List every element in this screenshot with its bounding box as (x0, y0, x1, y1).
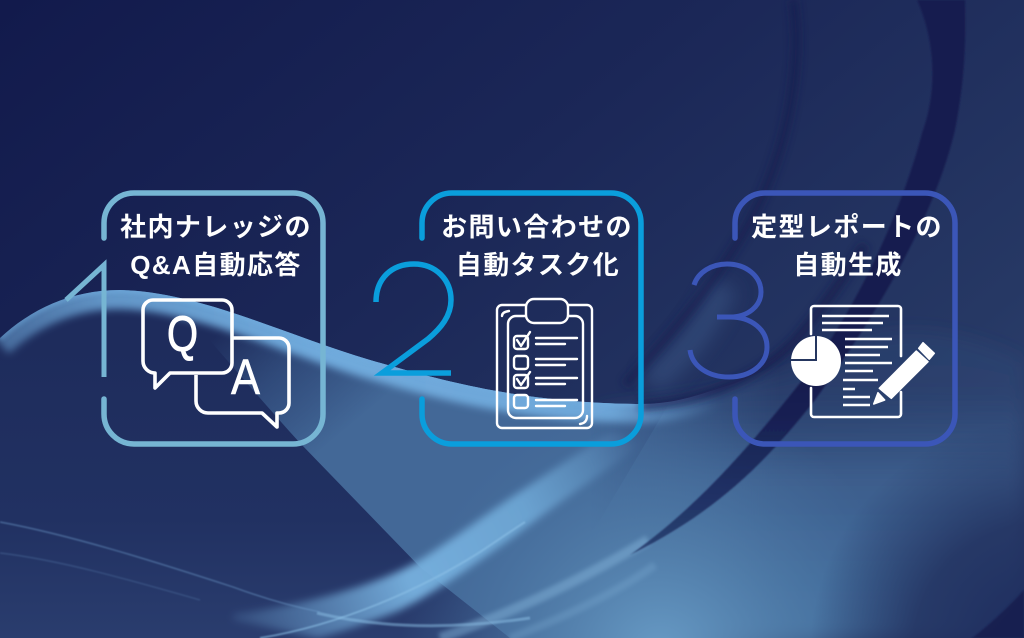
icon: clipboard checklist (497, 299, 592, 428)
panel 1: internal knowledge Q&A (66, 193, 323, 444)
dark ribbons (625, 0, 796, 385)
icon: Q and A speech bubbles: A (231, 349, 261, 405)
soft lighter streak between the ribbons (650, 285, 725, 382)
panel 3 heading (751, 212, 943, 280)
panel 3 heading: 定型レポートの (751, 212, 943, 242)
panel 2 heading: お問い合わせの (441, 212, 633, 242)
panel 1 heading: Q&A自動応答 (130, 250, 302, 280)
panel 1 heading: 社内ナレッジの (120, 212, 312, 242)
panel 1 heading (120, 212, 312, 280)
panel 3: routine report generation (690, 193, 955, 444)
panel 3 heading: 自動生成 (793, 250, 903, 280)
panel 1 numeral 1 (66, 265, 104, 377)
icon: Q and A speech bubbles: Q (167, 306, 198, 362)
panel 2 heading: 自動タスク化 (456, 250, 620, 280)
panel 2 heading (441, 212, 633, 280)
icon: report with pie chart and pencil (791, 306, 934, 417)
panel 2 numeral 2 (376, 264, 451, 373)
icon: Q and A speech bubbles (143, 300, 289, 427)
panel 2 frame (422, 193, 641, 444)
panel 3 numeral 3 (690, 264, 767, 377)
panel 1 frame (104, 193, 323, 444)
panel 3 frame (735, 193, 955, 444)
swoosh highlights (233, 432, 642, 638)
panel 2: inquiry auto-tasking (376, 193, 641, 444)
